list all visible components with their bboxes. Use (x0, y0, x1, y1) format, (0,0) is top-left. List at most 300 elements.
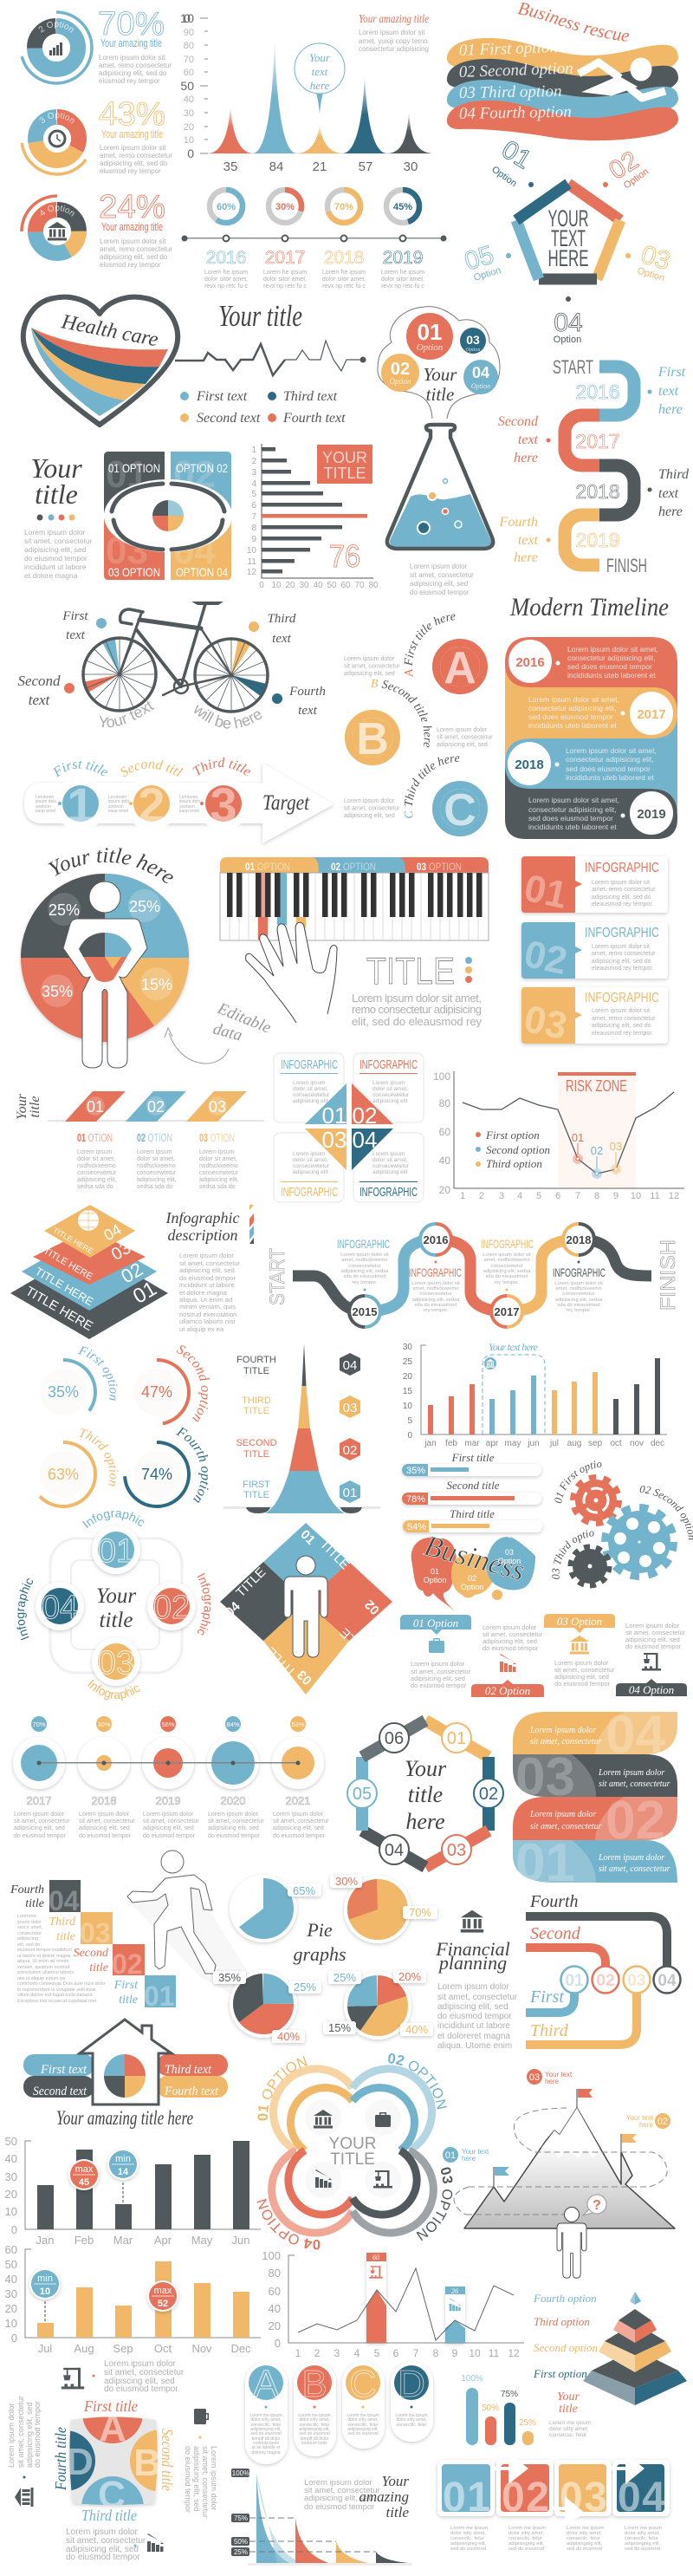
option 01 (489, 135, 536, 189)
timeline donuts 2016-2019: Lorem he ipsum (322, 270, 366, 276)
diamond with person: 03 (295, 1667, 315, 1688)
second text label: Second (498, 414, 539, 429)
bubble timeline 2017-2021: sit amet, consectetur (79, 1818, 135, 1825)
risk zone line chart: 6 (555, 1191, 560, 1201)
financial planning: planning (437, 1952, 507, 1974)
04 option: adipisicing elit, sed (625, 1636, 680, 1643)
road timeline: Lorem ipsum dolor sit (411, 1281, 460, 1286)
step titles: title (119, 1994, 138, 2007)
step titles: consectetur (17, 1931, 42, 1936)
option 02 (126, 1091, 186, 1190)
percent badges: 35% (42, 983, 73, 1000)
monthly bar chart: apr (486, 1439, 499, 1448)
numbered boxes with arrows: 02 (502, 2475, 549, 2521)
pill C: dolor sitty amet, (347, 2417, 379, 2423)
capsule bars: Lorem me ipsum (549, 2420, 591, 2426)
timeline donuts 2016-2019: revx np retc fu c (322, 283, 366, 289)
line chart with columns: 5 (374, 2347, 380, 2359)
peak chart: 20 (184, 122, 194, 133)
A B C callouts: sit amet, consectetur (437, 735, 493, 740)
infographic description: nostrud exercitation (179, 1311, 236, 1318)
decay chart: Lorem ipsum dolor (304, 2478, 372, 2488)
eye quadrant panel: OPTION 04 (176, 565, 228, 579)
target arrow: ipsum dolo (179, 799, 200, 804)
infographic flower: Infographic (198, 1572, 211, 1635)
numbered boxes with arrows: dolor sitty amet, (450, 2531, 486, 2536)
monthly bar chart: may (505, 1439, 521, 1448)
diamond with person: TITLE (337, 1625, 372, 1661)
infographic flower: Infographic (87, 1680, 140, 1701)
diamond with person: 01 (297, 1527, 318, 1548)
donut stat: 70%: Your amazing title (100, 37, 162, 49)
ABCD square: Second title (159, 2429, 176, 2491)
2016 row: Lorem ipsum dolor sit amet, (567, 645, 658, 654)
2019 row: 2019 (637, 807, 666, 822)
monthly bar chart: nov (630, 1439, 644, 1448)
bubble timeline 2017-2021 (13, 1716, 329, 1839)
risk zone line chart: Third option (486, 1157, 542, 1170)
road timeline: adipisicing elit, sedsa (412, 1298, 460, 1303)
monthly bar chart: Your text here (489, 1341, 539, 1353)
title block: elit, sed do eleausmod rey (352, 1015, 482, 1028)
your title side block: do eiusmod tempor (24, 554, 87, 563)
funnel spire: TITLE (243, 1366, 269, 1376)
numbered boxes with arrows: consectlc. felur (625, 2536, 658, 2541)
piano: 01 OPTION (245, 861, 290, 873)
infographic cards 01-03 (521, 856, 668, 1048)
donut stat: 24%: 24% (99, 189, 165, 225)
infographic flower (16, 1511, 211, 1701)
04 option: do eiusmod tempor (625, 1643, 682, 1650)
pie graphs (213, 1875, 437, 2043)
horizontal bar chart: 60 (340, 581, 351, 590)
house: Third text (165, 2063, 212, 2077)
hexagon title: Your (405, 1756, 447, 1781)
2016 row: consectetur adipisicing elit, (567, 654, 656, 662)
card 01 (521, 856, 668, 917)
four infographic cards with diamond: Lorem ipsum (293, 1151, 326, 1157)
road timeline: amet, nsdfsckxeemo (555, 1286, 602, 1291)
card 03: eleausmod rey tempor. (592, 1031, 653, 1037)
line chart with columns: 0 (275, 2337, 281, 2350)
gears (552, 1460, 693, 1588)
capsule bars: 75% (501, 2390, 518, 2399)
pipes: 03 (627, 1972, 646, 1990)
business paint splats: 02 (468, 1574, 476, 1583)
third text (249, 612, 296, 646)
card 02: INFOGRAPHIC (585, 926, 659, 940)
step titles: Excepteur sint occaecat cupidatat non (17, 1999, 96, 2004)
dark bar chart (5, 2135, 261, 2247)
gauge 74%: 74% (141, 1466, 172, 1483)
callout bubble: your text here: here (310, 79, 330, 92)
your title side block: adipisicing elit, sed (24, 545, 87, 554)
numbered boxes with arrows: 03 (560, 2475, 607, 2521)
timeline donuts 2016-2019: 70% (334, 202, 353, 212)
heart: health care: Health care (59, 310, 160, 352)
infographic description (165, 1205, 254, 1333)
column 60 (366, 2253, 386, 2343)
numbered petals: Lorem ipsum dolor (529, 1810, 596, 1819)
icon notes top (62, 2359, 185, 2394)
numbered petals: 04 (606, 1705, 665, 1765)
step titles: 03 (80, 1917, 111, 1948)
option 03: 03 (209, 1098, 226, 1116)
capsule bars: dolor sitty amet (549, 2426, 587, 2432)
bubble timeline 2017-2021: adipisicing elit, sed (143, 1825, 194, 1831)
option 02 bubble: Option (389, 377, 411, 386)
numbered petals: Lorem ipsum dolor (598, 1853, 664, 1863)
pipes: Third (530, 2021, 569, 2040)
dark bar chart: 20 (5, 2188, 17, 2201)
percent badges: 15% (141, 976, 172, 993)
stacked diamonds: TITLE HERE (42, 1246, 94, 1282)
circle C (437, 785, 483, 836)
clover options: 02 OPTION (388, 2053, 447, 2110)
third text: text (272, 632, 292, 646)
four infographic cards with diamond: INFOGRAPHIC (359, 1057, 418, 1072)
four infographic cards with diamond: 03 (322, 1127, 346, 1153)
pill A: dolorey magna (251, 2450, 281, 2456)
bubble timeline 2017-2021: do eiusmod tempor (14, 1833, 67, 1839)
icon notes top: Lorem ipsum dolor (104, 2359, 176, 2369)
road timeline: Lorem ipsum dolor sit (554, 1281, 603, 1286)
business rescue ribbons: 02 Second option (458, 59, 573, 81)
card 01: adipisicing elit, sed do (592, 894, 651, 901)
road timeline: sda do eieaustmod (485, 1274, 528, 1279)
flask with thought cloud: adipisicing elit, sed (410, 580, 468, 588)
eye quadrant panel: OPTION 02 (176, 461, 228, 475)
horizontal bar chart: 6 (251, 501, 256, 511)
bubble timeline 2017-2021: do eiusmod tempor (143, 1833, 196, 1839)
step titles (10, 1880, 176, 2012)
risk zone line chart: RISK ZONE (566, 1077, 627, 1095)
pill A: inoidunt tiods (253, 2441, 279, 2446)
bubble timeline 2017-2021: 56% (161, 1721, 175, 1728)
pentagon: TEXT (551, 225, 586, 251)
legend (180, 389, 346, 426)
card 02: Lorem ipsum dolor sit (592, 944, 650, 950)
flask with thought cloud: Lorem ipsum dolor (410, 563, 468, 570)
four infographic cards with diamond: INFOGRAPHIC (281, 1185, 338, 1200)
peak chart: 50 (180, 79, 194, 93)
diamond with person: TITLE (317, 1537, 353, 1572)
funnel spire: TITLE (243, 1406, 269, 1416)
four infographic cards with diamond: 01 (322, 1103, 346, 1129)
horizontal bar chart (247, 444, 379, 590)
option 03: consecewtetur (199, 1170, 239, 1176)
chart note: consectetur adipisicing (359, 45, 429, 53)
pill A: Lorem me ipsum (249, 2413, 282, 2418)
donut stat: 24%: adipisicing elit, sed do (100, 253, 168, 261)
monthly bar chart: 15 (403, 1387, 412, 1396)
first text label: First (657, 365, 686, 380)
flask with thought cloud: sit amet, consectetur (410, 571, 474, 579)
capsule bars: Your (557, 2391, 580, 2404)
dark bar chart: Jun (232, 2234, 249, 2247)
numbered petals: 01 (515, 1833, 575, 1893)
decay chart: adipisicing elit, sed (304, 2494, 373, 2503)
road timeline: Lorem ipsum dolor sit (483, 1252, 531, 1258)
monthly bar chart: 10 (403, 1402, 412, 1411)
pill C: sed do eiusmod (347, 2431, 379, 2436)
your title side block: et dolore magna (24, 571, 78, 580)
road timeline: INFOGRAPHIC (481, 1237, 534, 1251)
rotated heading: your title: title (28, 1096, 42, 1117)
peak chart: 60 (184, 68, 194, 78)
callout bubble: your text here: text (312, 65, 328, 78)
business rescue ribbons: 03 Third option (459, 82, 562, 102)
progress bars: Third title (450, 1507, 495, 1520)
2019 row: consectetur adipisicing elit, (528, 805, 617, 814)
numbered boxes with arrows: Lorem me ipsum (450, 2526, 488, 2531)
flask with thought cloud: Your (424, 364, 457, 385)
left note: sit amet, consectetur (16, 2396, 25, 2468)
2017 row: Lorem ipsum dolor sit amet, (528, 695, 619, 704)
chart note (359, 13, 429, 53)
bubble timeline 2017-2021: 2021 (286, 1794, 310, 1807)
title block: Lorem ipsum dolor sit amet, (352, 992, 482, 1005)
step titles: veniam, quistrum nostrud (17, 1965, 70, 1970)
diamond with person: 04 (223, 1598, 243, 1620)
gauge 35%: First option (78, 1345, 118, 1401)
pill B: tempff dil dolor (301, 2436, 329, 2442)
horizontal bar chart: 10 (271, 581, 282, 590)
hexagon title: here (405, 1809, 445, 1834)
numbered petals: sit amet, consectetur (530, 1737, 602, 1747)
fourth text label: Fourth (499, 515, 538, 530)
second text (17, 673, 74, 708)
option 02: consecewtetur (137, 1170, 177, 1176)
orange bar chart: Sep (113, 2342, 133, 2355)
decay chart: 50% (234, 2538, 248, 2546)
step titles: adipiscing (17, 1936, 38, 1942)
A B C callouts: Lorem ipsum dolor (437, 727, 488, 733)
hexagon title: 06 (385, 1729, 404, 1748)
road timeline: consecewtetur (562, 1291, 595, 1297)
infographic description: incididunt ut labore (179, 1281, 235, 1289)
step titles: elit, sed do (17, 1942, 40, 1948)
rotated heading: your title (15, 1093, 42, 1120)
risk zone line chart: 01 (572, 1131, 584, 1144)
target arrow: ipsum dolo (108, 799, 129, 804)
card 03 (521, 987, 668, 1048)
pipes: 04 (657, 1972, 677, 1990)
target arrow: kaop emel (108, 809, 128, 814)
option 04: 04 (554, 309, 583, 337)
card 01: INFOGRAPHIC (585, 861, 659, 875)
second text label (498, 414, 551, 465)
step 1: 1 (67, 777, 94, 832)
ABCD square: First title (83, 2397, 138, 2415)
bubble timeline 2017-2021: 2018 (92, 1794, 116, 1807)
funnel spire: TITLE (243, 1490, 269, 1500)
2016 row (508, 640, 658, 683)
four infographic cards with diamond: consecewtetur (293, 1092, 330, 1098)
ABCD square: Third title (81, 2507, 137, 2524)
01 option: sit amet, consectetur (411, 1668, 471, 1675)
monthly bar chart (403, 1341, 667, 1448)
pie 25/40/35: 40% (277, 2030, 300, 2043)
pill B: B (301, 2363, 327, 2405)
card 02: eleausmod rey tempor. (592, 966, 653, 972)
bubble timeline 2017-2021: adipisicing elit, sed (79, 1825, 130, 1831)
your title box (317, 445, 372, 484)
capsule bars: 25% (519, 2418, 536, 2428)
serpentine timeline: 2017 (575, 430, 620, 452)
business rescue ribbons: 01 First option (458, 38, 558, 60)
option 05: 05 (461, 240, 497, 276)
hand outline (246, 922, 337, 1023)
04 option: Lorem ipsum dolor (625, 1622, 680, 1630)
peak chart: 90 (184, 28, 194, 38)
road timeline: START (266, 1248, 289, 1305)
card 02: amet, remo consectetur (592, 951, 656, 957)
option 02: 02 OTION (137, 1131, 172, 1144)
numbered boxes with arrows: Lorem me ipsum (625, 2526, 662, 2531)
timeline donuts 2016-2019: dolor sitor amet, (263, 276, 307, 283)
peak chart: 70 (184, 55, 194, 65)
pie 20/40/15/25: 15% (328, 2021, 351, 2034)
ABCD square: B (133, 2442, 161, 2484)
circle A (437, 643, 483, 693)
hexagon 04: 04 (343, 1358, 357, 1373)
step titles: nisi ut aliquip extum ea (17, 1976, 65, 1981)
2016 node (420, 1224, 451, 1255)
horizontal bar chart: 0 (259, 581, 264, 590)
pyramid: Second option (534, 2341, 598, 2354)
monthly bar chart: jul (549, 1439, 559, 1448)
bubble timeline 2017-2021: adipisicing elit, sed (14, 1825, 65, 1831)
ECG line (175, 341, 366, 375)
decay chart: 25% (234, 2548, 248, 2556)
donut stat: 24%: amet, remo consectetur (100, 245, 172, 253)
third text label: text (658, 486, 679, 501)
risk zone line chart: 40 (439, 1155, 450, 1167)
flask with thought cloud: title (426, 384, 454, 405)
option 04: Option (554, 335, 581, 345)
step titles: commodo consequat. Duis aute irure dolor (17, 1981, 106, 1987)
monthly bar chart: sep (588, 1439, 602, 1448)
icon notes top: do eiusmod tempor (104, 2384, 178, 2394)
card 03: Lorem ipsum dolor sit (592, 1008, 650, 1014)
01 option: do eiusmod tempor (411, 1682, 467, 1689)
risk zone line chart: 02 (591, 1144, 603, 1157)
your title box: TITLE (323, 465, 366, 482)
risk zone line chart: 100 (433, 1070, 450, 1083)
bottom note (66, 2527, 164, 2562)
column 60: 60 (372, 2254, 379, 2261)
label 02: Your text (626, 2114, 654, 2122)
timeline donuts 2016-2019: 2017 (265, 248, 305, 268)
pill A (245, 2362, 288, 2464)
donut stat: 24%: Your amazing title (101, 221, 163, 233)
horizontal bar chart: 76 (329, 538, 360, 574)
03 option: sit amet, consectetur (554, 1666, 615, 1674)
serpentine timeline: 2016 (575, 381, 620, 403)
numbered boxes with arrows: Lorem me ipsum (567, 2526, 604, 2531)
financial planning: do eiusmod tempor (437, 2012, 512, 2021)
pill C: consectlic. felur (348, 2423, 379, 2428)
bubble timeline 2017-2021: adipisicing elit, sed (273, 1825, 324, 1831)
step titles: eiusmod tempor incididunt (17, 1948, 72, 1953)
2018 row (508, 742, 657, 785)
road timeline (266, 1224, 680, 1327)
road timeline: sda do eieaustmod (343, 1274, 386, 1279)
hexagon 01: 01 (343, 1486, 357, 1500)
icon notes top: adipiscing elit, sed (104, 2377, 175, 2386)
pie 20/40/15/25: 25% (334, 1971, 356, 1984)
horizontal bar chart: 70 (354, 581, 365, 590)
02 option: 02 Option (485, 1684, 530, 1697)
four infographic cards with diamond: adipisicing elit (293, 1169, 328, 1175)
option 04 bubble: Option (471, 382, 490, 390)
monthly bar chart: aug (567, 1439, 581, 1448)
line chart with columns: 11 (489, 2347, 500, 2359)
bubble timeline 2017-2021: do eiusmod tempor (208, 1833, 261, 1839)
callout bubble: your text here (295, 43, 345, 114)
decay chart: 100% (232, 2469, 249, 2477)
dark gear (571, 1547, 609, 1585)
pentagon: YOUR (547, 205, 589, 231)
pill B: adipisingnig elit, (299, 2427, 330, 2432)
A B C callouts: B Second title here (371, 680, 431, 747)
horizontal bar chart: 4 (251, 479, 256, 489)
card 03: INFOGRAPHIC (585, 991, 659, 1005)
piano (220, 857, 489, 1023)
piano: 03 OPTION (417, 861, 462, 873)
infographic flower: 02 (153, 1590, 190, 1626)
2019 row (528, 791, 673, 835)
donut stat: 70%: 70% (98, 6, 165, 42)
pill B: Lorem me ipsum (298, 2413, 331, 2418)
step titles: Fourth (10, 1883, 44, 1896)
pie 25/40/35 (213, 1970, 321, 2043)
capsule bars: consecsc. felur (549, 2432, 587, 2438)
progress bars: Second title (446, 1479, 500, 1492)
timeline donuts 2016-2019: revx np retc fu c (263, 283, 307, 289)
progress bars (402, 1451, 542, 1532)
business rescue ribbons: 04 Fourth option (459, 103, 572, 123)
infographic description: description (168, 1226, 237, 1244)
donut stat: 43%: Your amazing title (101, 128, 163, 140)
pill D: dolor sitty amet, (396, 2417, 427, 2423)
numbered boxes with arrows: Lorem me ipsum (508, 2526, 546, 2531)
funnel spire (223, 1343, 380, 1513)
orange bar chart: Jul (38, 2342, 52, 2355)
label 03 (527, 2069, 573, 2085)
2017 row: sed does eiusmod tempor (528, 712, 613, 721)
label 01 (443, 2147, 489, 2163)
min badge (29, 2268, 61, 2300)
risk zone line chart: 1 (460, 1191, 465, 1201)
bubble timeline 2017-2021: sit amet, consectetur (208, 1818, 264, 1825)
pill C: Lorem me ipsum (346, 2413, 379, 2418)
horizontal bar chart: 3 (251, 468, 256, 478)
gears: 01 First option (554, 1460, 601, 1503)
option 04 (554, 296, 583, 345)
pyramid (533, 2292, 687, 2405)
2016 row: sed does eiusmod tempor (567, 662, 652, 671)
gauge 35% (48, 1345, 118, 1412)
walking man (127, 1851, 277, 2020)
horizontal bar chart: 2 (251, 457, 256, 466)
card 03: adipisicing elit, sed do (592, 1023, 651, 1029)
title block: TITLE (366, 950, 455, 992)
04 option: 04 Option (629, 1683, 674, 1696)
step titles: ut labore et dolore magna (17, 1954, 70, 1959)
option 03: 03 OTION (199, 1131, 235, 1144)
